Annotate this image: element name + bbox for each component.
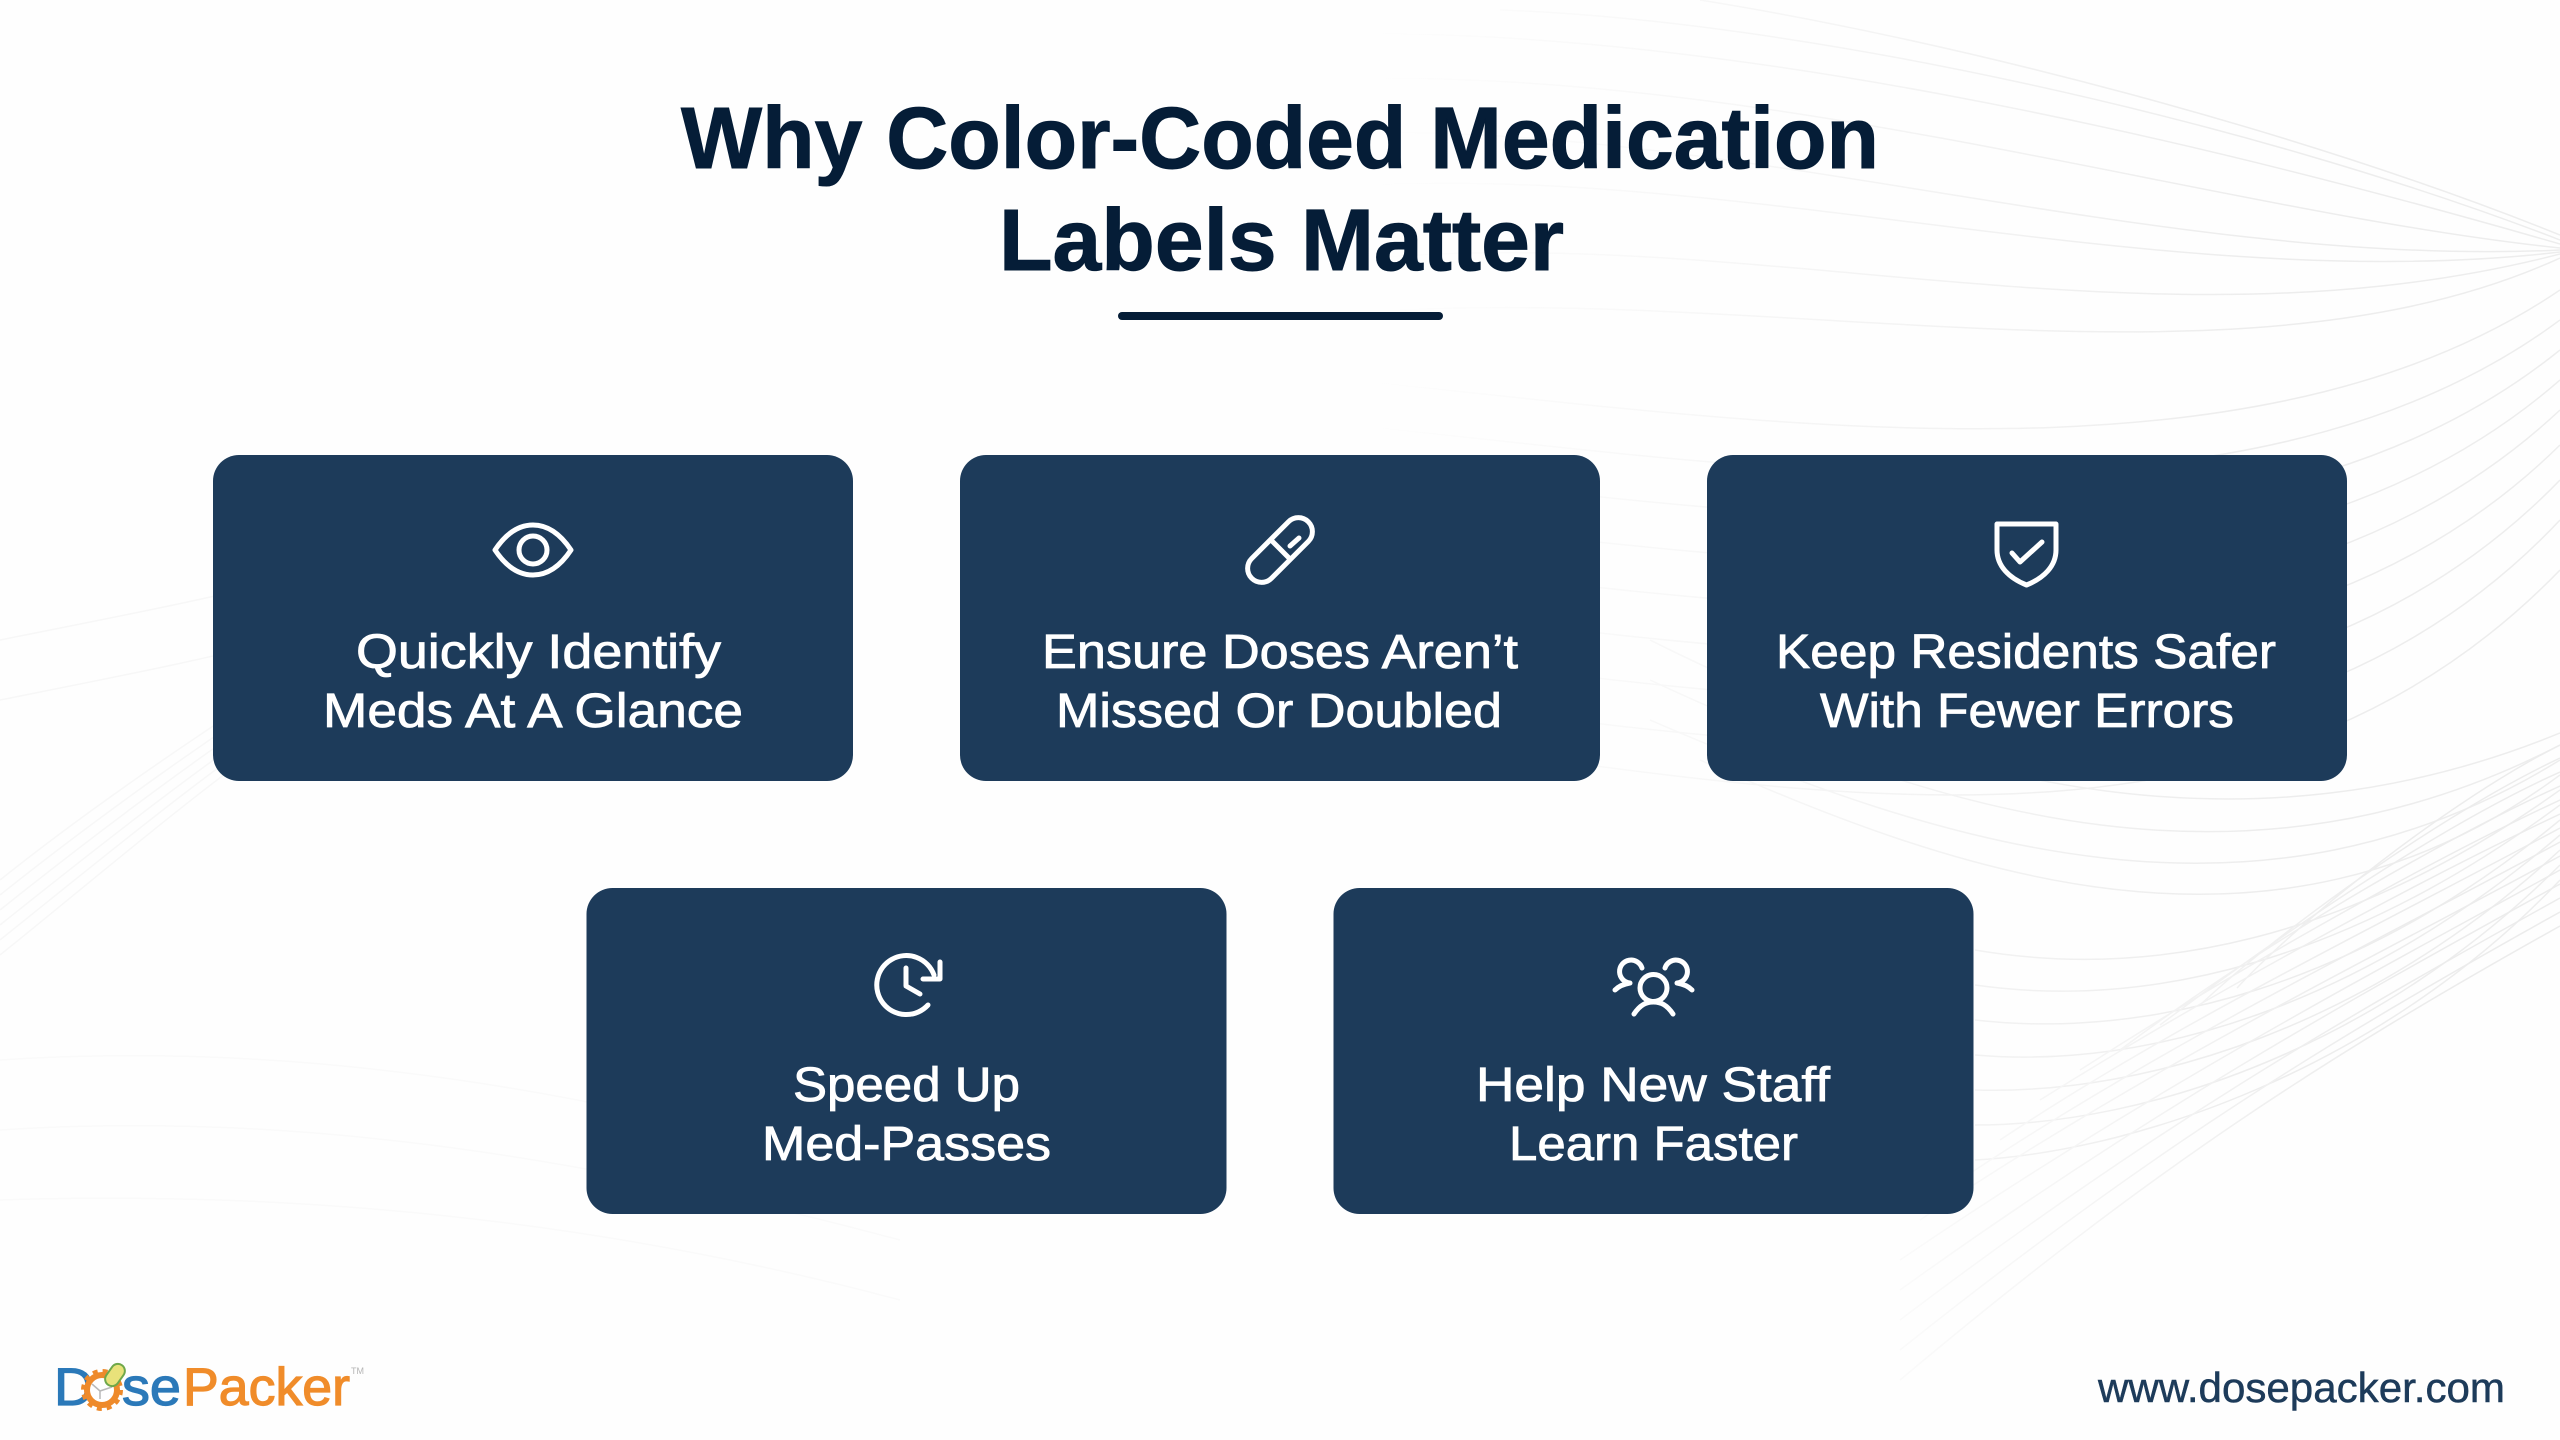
- panel: keep residents safer: [1707, 455, 2347, 781]
- logo: DosePacker: TM: [351, 1366, 364, 1376]
- panel: speed up med-passes: [586, 888, 1226, 1214]
- icon: shield with check: [1997, 524, 2056, 585]
- card text: speed up: Speed Up: [793, 1059, 1020, 1112]
- panel: ensure doses: [960, 455, 1600, 781]
- card text: ensure doses: [1042, 626, 1518, 738]
- card text: speed up: Med-Passes: [762, 1118, 1051, 1171]
- icon: eye: [495, 525, 571, 575]
- card text: ensure doses: Missed Or Doubled: [1056, 685, 1502, 738]
- logo: DosePacker: Packer: [183, 1358, 350, 1417]
- card text: quickly identify: Meds At A Glance: [323, 685, 743, 738]
- card text: keep residents safer: Keep Residents Safer: [1776, 626, 2276, 679]
- icon: gear with clock and pill: [83, 1361, 128, 1409]
- card text: help new staff: [1476, 1059, 1831, 1171]
- card text: ensure doses: Ensure Doses Aren’t: [1042, 626, 1518, 679]
- title: [681, 90, 1879, 289]
- panel: quickly identify meds: [213, 455, 853, 781]
- card text: quickly identify: Quickly Identify: [356, 626, 721, 679]
- card text: help new staff: Learn Faster: [1509, 1118, 1798, 1171]
- logo: DosePacker: [54, 1358, 364, 1417]
- website url: www.dosepacker.com: [2097, 1364, 2505, 1411]
- card text: quickly identify: [323, 626, 743, 738]
- title underline: [1118, 312, 1443, 320]
- panel: help new staff: [1334, 888, 1974, 1214]
- card text: help new staff: Help New Staff: [1476, 1059, 1831, 1112]
- icon: three people: [1615, 960, 1692, 1014]
- card text: keep residents safer: [1776, 626, 2276, 738]
- card text: keep residents safer: With Fewer Errors: [1820, 685, 2234, 738]
- icon: pill: [1242, 512, 1318, 588]
- card text: speed up: [762, 1059, 1051, 1171]
- icon: clock with arrow: [877, 956, 940, 1015]
- title: Why Color-Coded Medication: [681, 90, 1879, 187]
- title: Labels Matter: [999, 192, 1564, 289]
- logo: DosePacker: se: [122, 1358, 181, 1417]
- logo: DosePacker: D: [54, 1358, 94, 1417]
